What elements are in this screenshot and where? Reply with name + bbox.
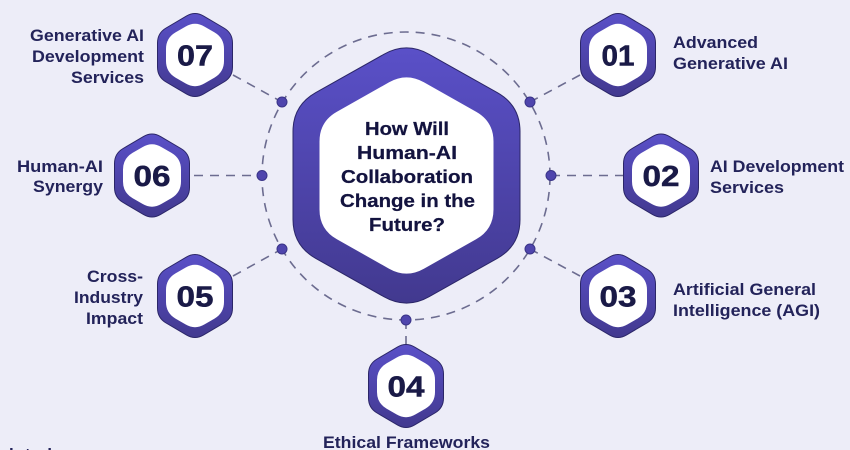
title: Human-AI [357,142,457,163]
connector: 05 [233,249,282,276]
badge 01: 01 [602,40,634,72]
title: Change in the [340,190,475,211]
badge 06: 06 [134,161,170,193]
orbit node dots [257,97,556,325]
title: How Will [365,118,449,139]
badge 02: 02 [642,161,680,193]
label 03: Artificial General [673,280,816,299]
label 05: Cross- [87,267,143,286]
badge 04: 04 [388,372,424,404]
label 03 [673,280,820,320]
label 06: Human-AI [17,157,103,176]
label 06 [17,157,104,196]
label 05: Impact [86,309,143,328]
connector: 06 [194,174,262,176]
label 01 [673,33,788,73]
connector: 01 [530,75,580,102]
label 02: Services [710,178,784,197]
label 05 [74,267,144,328]
badge 07 [158,14,232,96]
label 02: AI Development [710,157,844,176]
label 06: Synergy [33,177,104,196]
title: Future? [369,214,445,235]
label 01: Advanced [673,33,758,52]
badge 03: 03 [600,282,636,314]
label 07: Generative AI [30,26,144,45]
dashed orbit ring [262,32,550,320]
label 02 [710,157,844,197]
connector: 07 [233,75,282,102]
label 03: Intelligence (AGI) [673,301,820,320]
badge 04 [368,345,444,427]
label 07: Services [71,68,144,87]
badge 03 [580,255,656,337]
connector: 04 [405,320,407,345]
central hexagon [293,48,520,303]
connector: 03 [530,249,580,276]
title: Collaboration [341,166,473,187]
badge 02 [624,134,698,217]
label 05: Industry [74,288,144,307]
badge 06 [114,134,190,217]
badge 01 [580,14,656,96]
connector: 02 [551,174,623,176]
badge 07: 07 [177,40,213,72]
badge 05 [158,255,232,337]
title [340,118,475,235]
label 01: Generative AI [673,54,788,73]
label 07 [30,26,144,87]
badge 05: 05 [176,282,214,314]
label 07: Development [32,47,144,66]
